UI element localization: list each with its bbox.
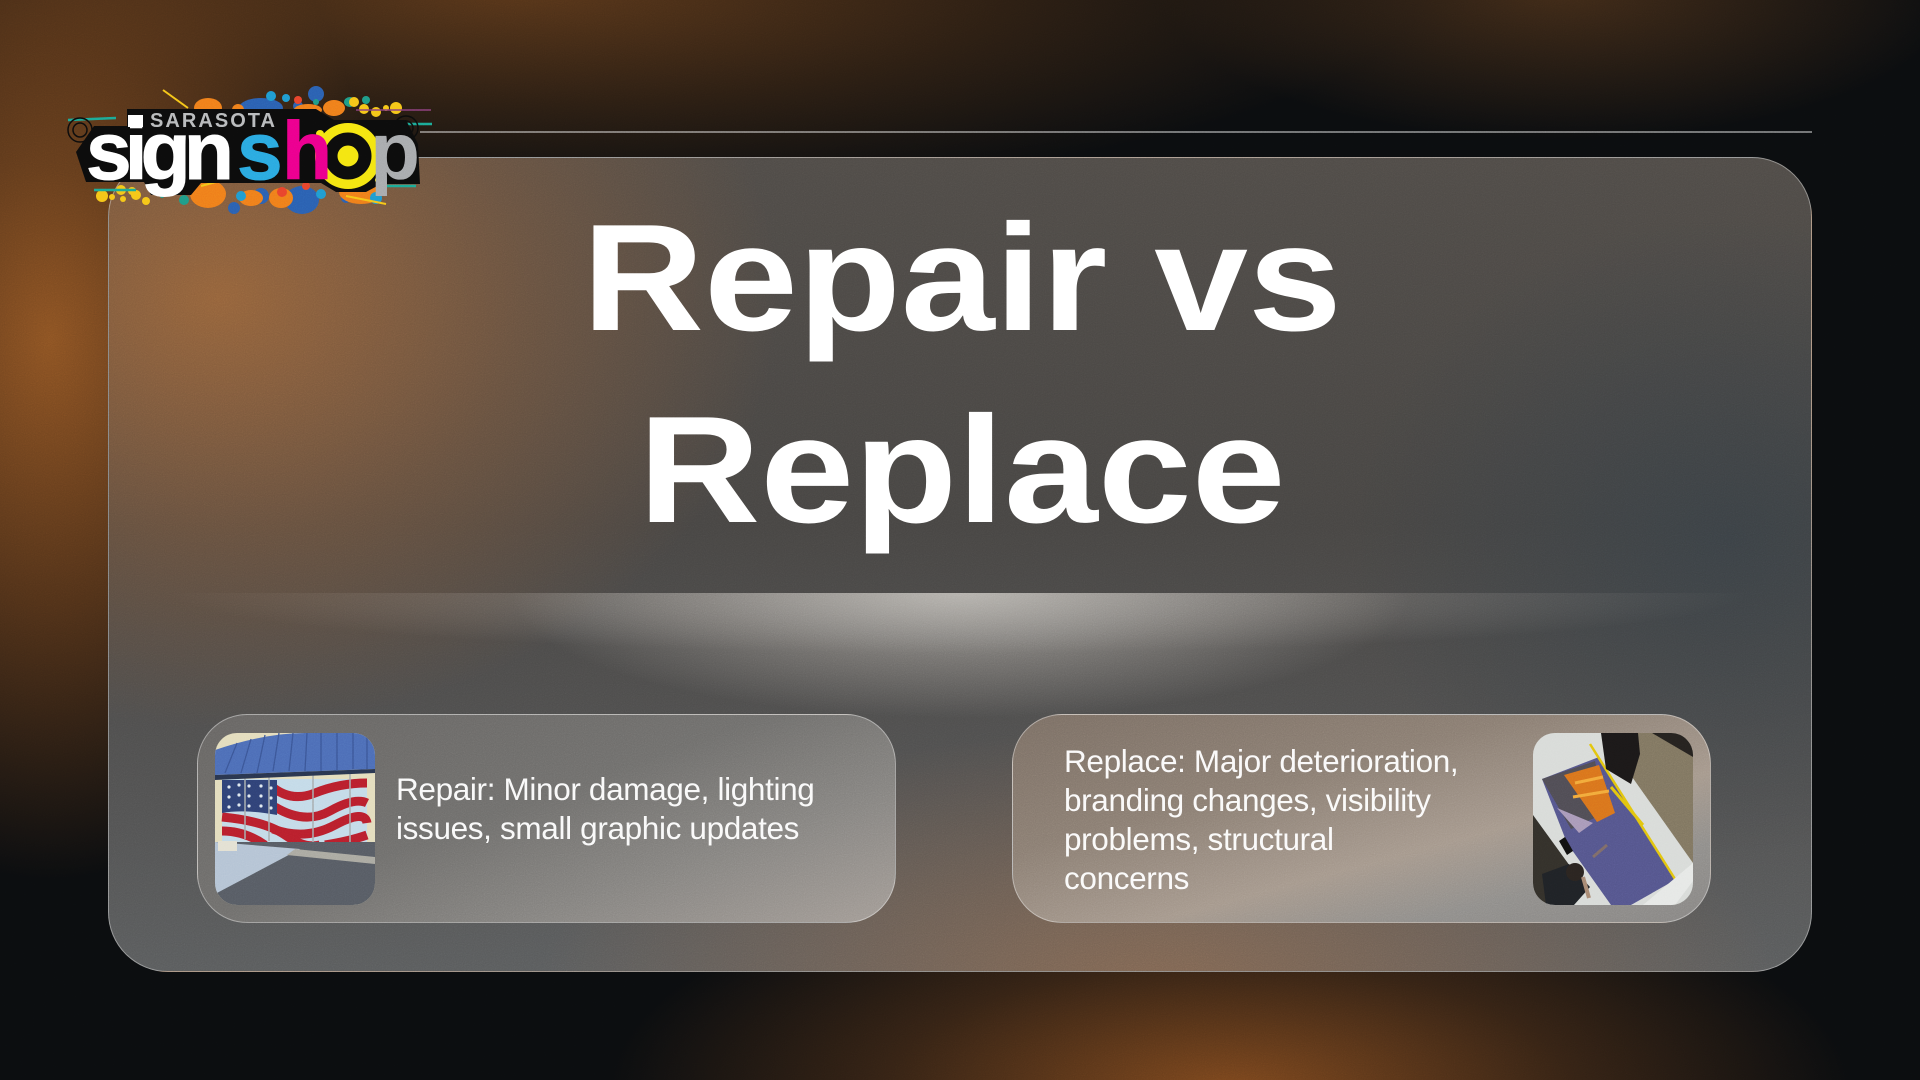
person top	[1601, 733, 1640, 784]
text: replace: problems, structural	[1064, 821, 1334, 857]
text: replace	[1064, 743, 1458, 896]
title: Replace	[638, 385, 1286, 555]
canton with stars	[222, 780, 277, 815]
text: replace: concerns	[1064, 860, 1189, 896]
small square dot of i	[128, 115, 143, 127]
yellow splat	[315, 123, 381, 189]
text: replace: Replace: Major deterioration,	[1064, 743, 1458, 779]
title	[582, 193, 1342, 555]
floor	[1601, 733, 1693, 863]
letter s: s	[237, 106, 283, 197]
text: replace: branding changes, visibility	[1064, 782, 1431, 818]
table right bottom	[1643, 863, 1693, 905]
light band glow	[109, 593, 1813, 763]
logo black backing	[76, 109, 420, 195]
main glass panel	[108, 157, 1812, 972]
awning	[215, 733, 375, 775]
letter h: h	[282, 106, 332, 197]
text: repair	[396, 771, 814, 846]
word SARASOTA: SARASOTA	[150, 110, 275, 132]
black items	[1559, 837, 1573, 855]
card: replace	[1012, 714, 1711, 923]
photo: flag mural storefront	[215, 733, 375, 905]
print on table	[1542, 757, 1675, 905]
logo: Sarasota Sign Shop	[67, 86, 432, 214]
letter p: p	[370, 106, 420, 197]
card: repair	[197, 714, 896, 923]
top rule line	[420, 131, 1812, 133]
photo: workers applying vinyl print	[1533, 733, 1693, 905]
wordmark sign: sign	[86, 106, 234, 197]
paint splatter	[68, 86, 432, 214]
title: Repair vs	[582, 193, 1342, 363]
storefront mural	[222, 779, 367, 855]
grunge ring marks	[68, 116, 418, 142]
text: repair: issues, small graphic updates	[396, 810, 799, 846]
person bottom	[1542, 864, 1590, 905]
text: repair: Repair: Minor damage, lighting	[396, 771, 814, 807]
ground	[215, 842, 375, 905]
